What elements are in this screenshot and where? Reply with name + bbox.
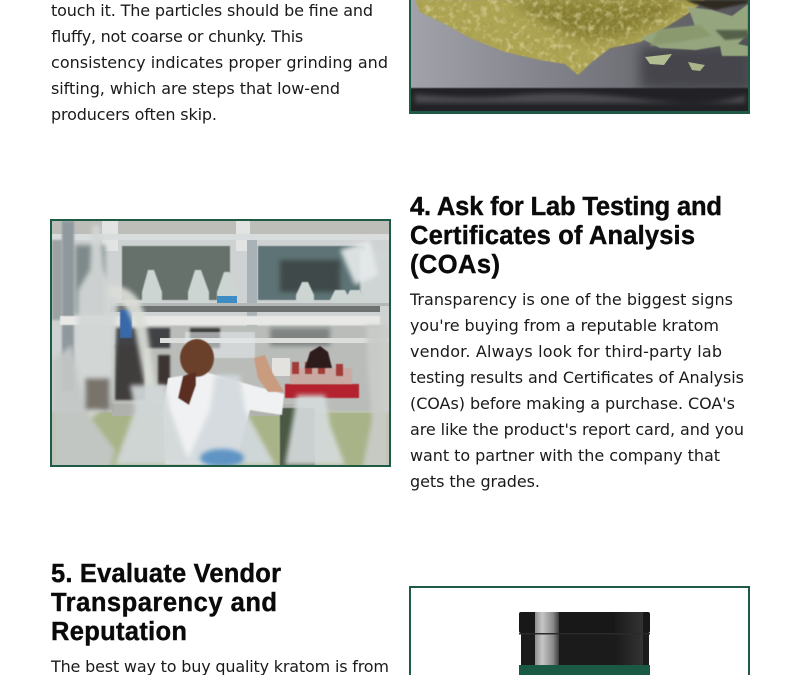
- paragraph: lab testing text: [409, 290, 744, 491]
- jar body: [521, 634, 649, 666]
- paragraph: powder texture text: consistency indicates proper grinding and: [51, 53, 388, 72]
- photo: kratom product jar: [410, 587, 749, 675]
- paragraph: powder texture text: producers often skip.: [51, 105, 217, 124]
- flasks on shelf: [142, 270, 364, 303]
- paragraph: lab testing text: are like the product's report card, and you: [410, 420, 744, 439]
- heading: step 5 vendor transparency: Transparency and: [51, 589, 277, 617]
- paragraph: lab testing text: testing results and Certificates of Analysis: [410, 368, 744, 387]
- window: right cabinet: [258, 246, 366, 300]
- heading: step 5 vendor transparency: Reputation: [51, 618, 187, 646]
- heading: step 4 lab testing: (COAs): [410, 251, 500, 279]
- paragraph: lab testing text: want to partner with the company that: [410, 446, 720, 465]
- glassware rack: [185, 332, 255, 358]
- heading: step 5 vendor transparency: 5. Evaluate Vendor: [51, 560, 281, 588]
- paragraph: powder texture text: sifting, which are steps that low-end: [51, 79, 340, 98]
- window: left cabinet: [122, 246, 230, 300]
- photo: kratom powder and leaves on slate: [405, 0, 755, 114]
- red reagent tray: [285, 384, 359, 398]
- paragraph: lab testing text: vendor. Always look for third-party lab: [410, 342, 722, 361]
- paragraph: powder texture text: [51, 1, 388, 124]
- jar label: [519, 665, 650, 675]
- heading: step 4 lab testing: 4. Ask for Lab Testing and: [410, 193, 722, 221]
- jar lid: [519, 612, 650, 633]
- heading: step 5 vendor transparency: [51, 560, 281, 646]
- photo: scientist in laboratory: [51, 220, 390, 472]
- foreground bottles: [52, 225, 389, 470]
- scientist: [163, 339, 284, 464]
- paragraph: lab testing text: gets the grades.: [410, 472, 540, 491]
- heading: step 4 lab testing: Certificates of Analysis: [410, 222, 695, 250]
- paragraph: lab testing text: (COAs) before making a purchase. COA's: [410, 394, 735, 413]
- heading: step 4 lab testing: [410, 193, 722, 279]
- paragraph: powder texture text: touch it. The particles should be fine and: [51, 1, 373, 20]
- paragraph: lab testing text: Transparency is one of the biggest signs: [409, 290, 733, 309]
- paragraph: lab testing text: you're buying from a reputable kratom: [410, 316, 719, 335]
- paragraph: powder texture text: fluffy, not coarse or chunky. This: [51, 27, 303, 46]
